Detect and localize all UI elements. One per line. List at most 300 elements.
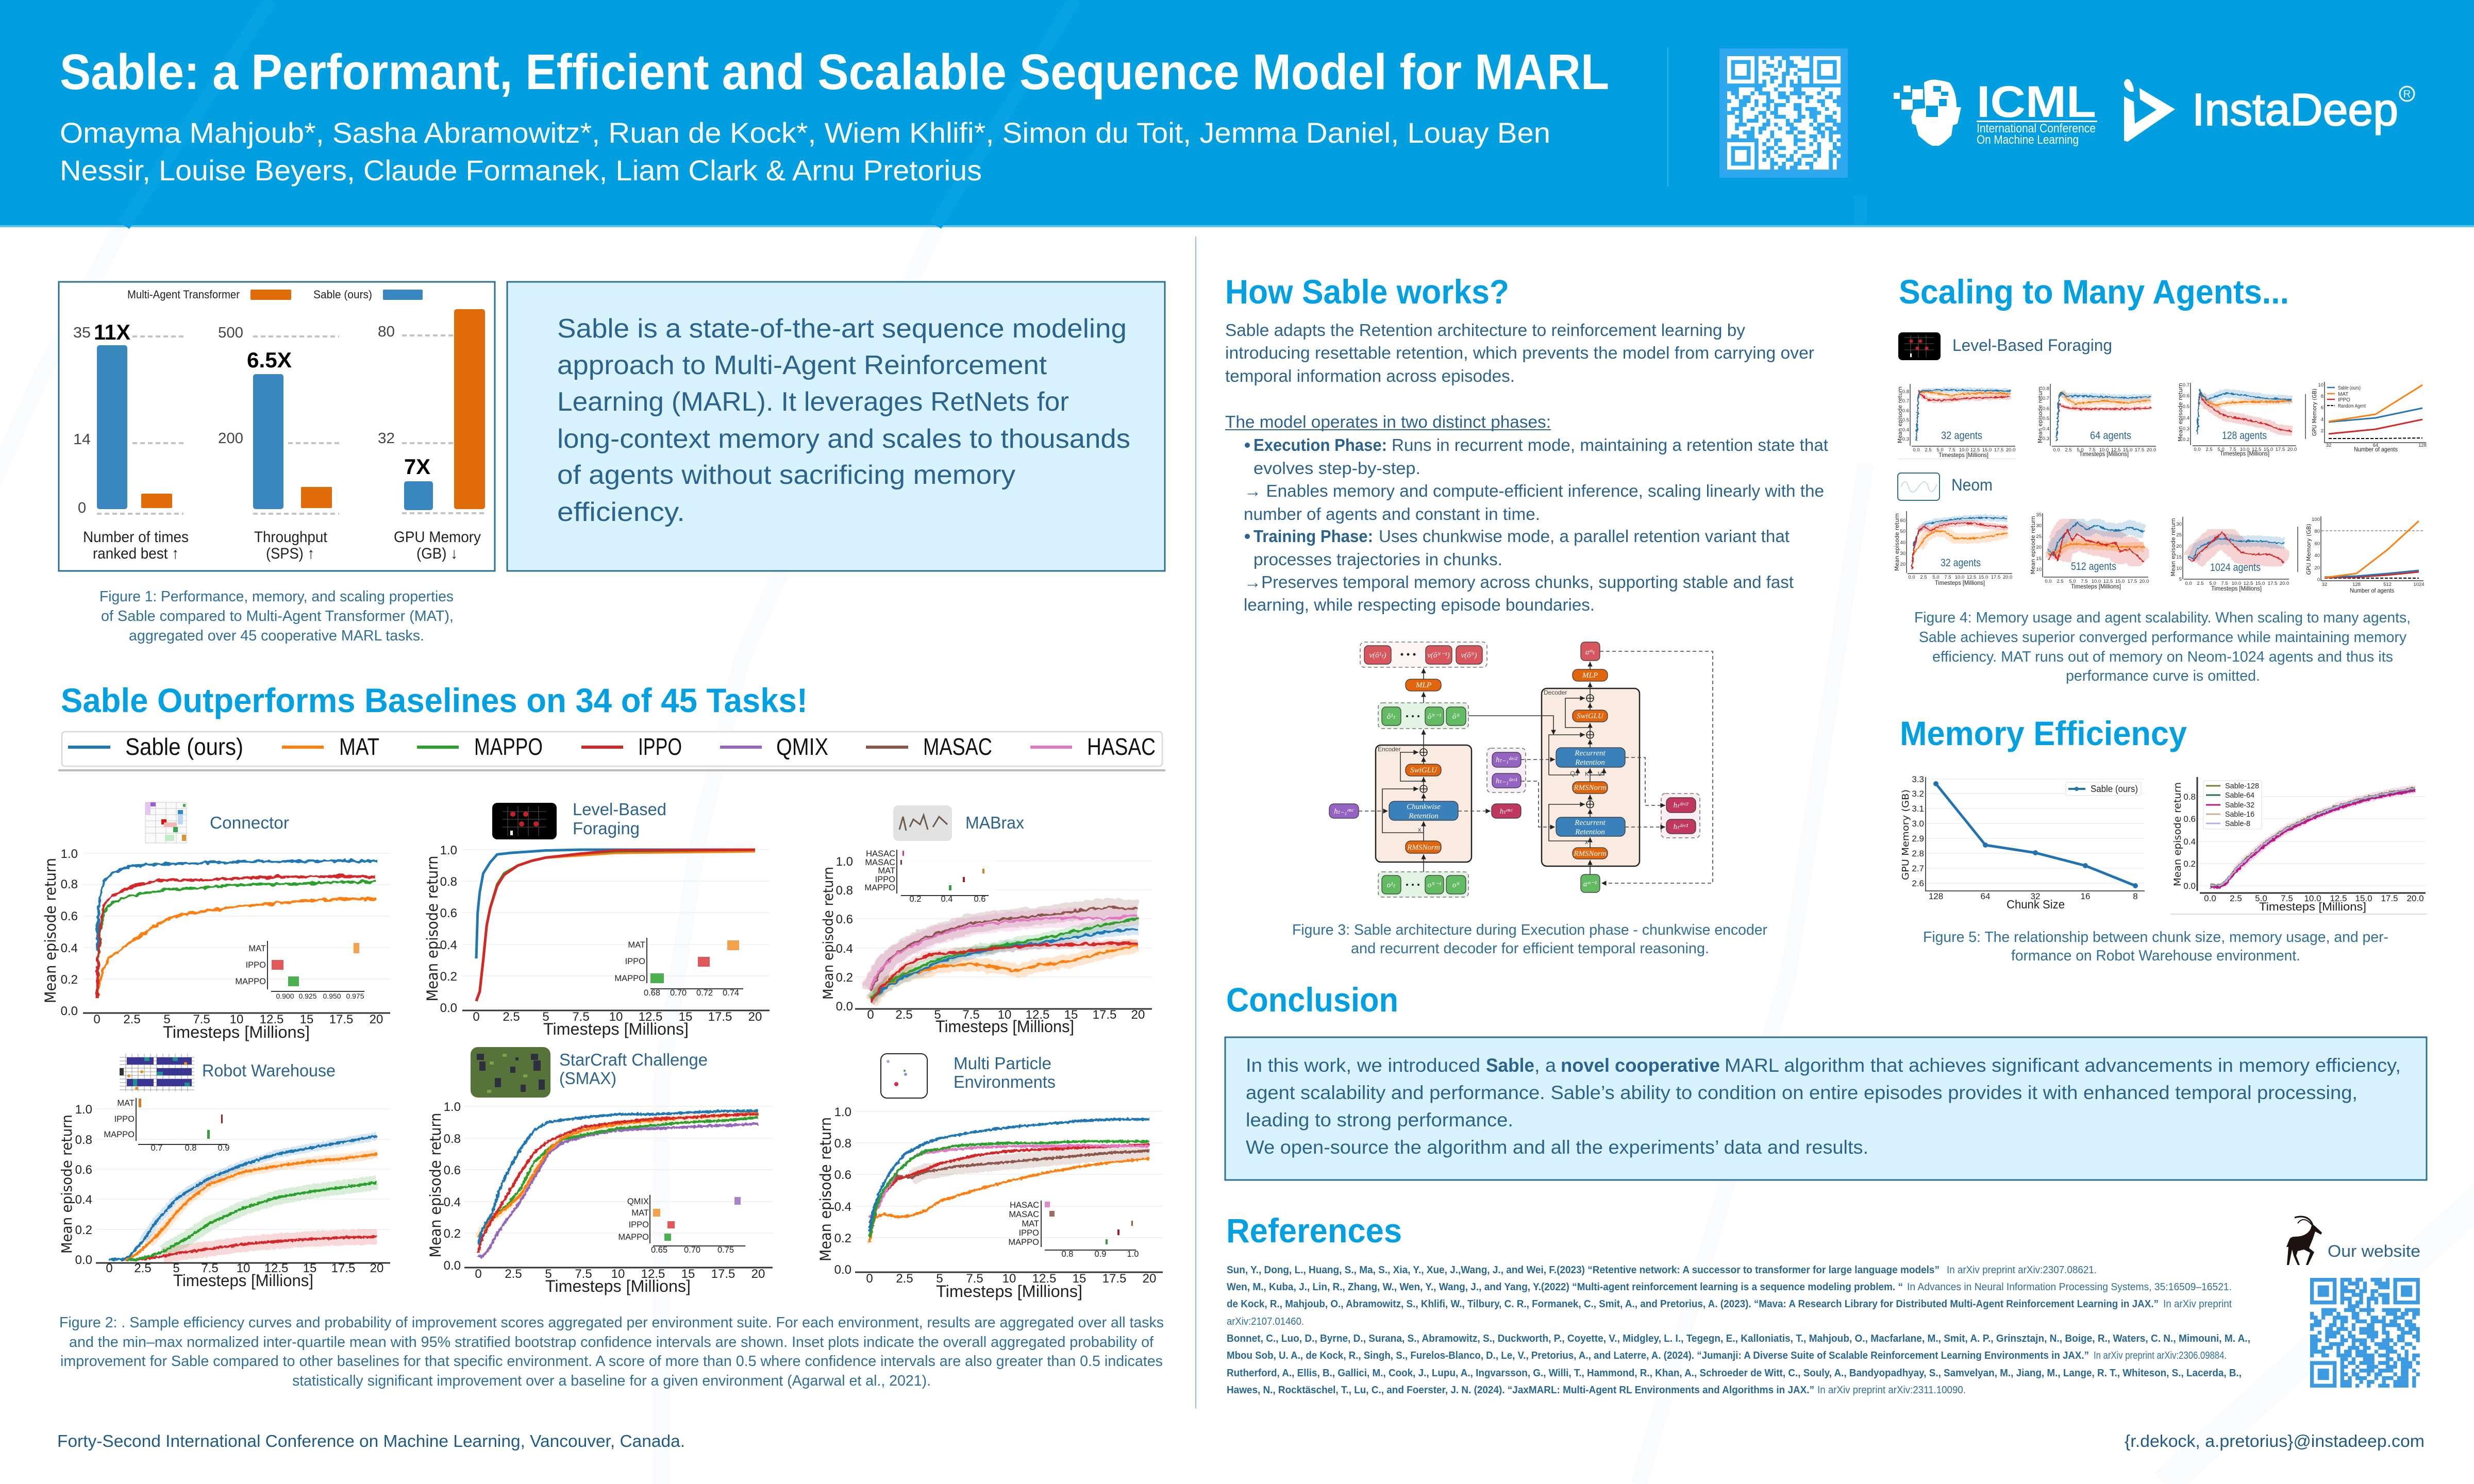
bar values: 14 bbox=[73, 431, 91, 448]
chart: Neom 32 agents: 50 bbox=[1900, 529, 1905, 534]
legend: Sable-8 bbox=[2225, 819, 2250, 828]
block labels: SwiGLU bbox=[1410, 766, 1437, 774]
conclusion callout: MARL algorithm that achieves significant advancements in memory efficiency, bbox=[1725, 1055, 2401, 1076]
chart: chunk size performance: Timesteps [Millions] bbox=[2259, 900, 2366, 913]
inset: MABrax probability of improvement: 0.4 bbox=[941, 895, 952, 904]
inset: MABrax probability of improvement: 0.6 bbox=[974, 895, 985, 904]
chart: LBF 32 agents: 0.5 bbox=[1902, 417, 1909, 423]
panel: Scaling to Many Agents: Neom bbox=[1951, 476, 1993, 494]
panel: SMAX bbox=[427, 1047, 773, 1295]
chart: LBF 32 agents: 0.7 bbox=[1902, 398, 1909, 404]
chart: Connector curves: 0.4 bbox=[61, 941, 78, 955]
chart: MABrax curves: 1.0 bbox=[836, 855, 853, 869]
chart: Neom 1024 agents bbox=[2170, 517, 2289, 592]
axis labels: Number of times bbox=[83, 529, 189, 546]
chart: LBF curves: 0 bbox=[473, 1010, 480, 1024]
chart: MABrax curves: 0.8 bbox=[836, 884, 853, 898]
conclusion callout bbox=[1225, 1037, 2427, 1180]
conclusion callout: Sable bbox=[1486, 1055, 1534, 1076]
chart: SMAX curves: 0.6 bbox=[444, 1163, 461, 1177]
block labels: MLP bbox=[1582, 671, 1598, 680]
chart: Connector curves: 1.0 bbox=[61, 847, 78, 861]
chart: LBF 32 agents: 0.6 bbox=[1902, 408, 1909, 414]
legend: Sable-32 bbox=[2225, 801, 2254, 810]
chart: chunk size performance: 20.0 bbox=[2406, 893, 2424, 903]
chart: MPE curves: 10 bbox=[1002, 1272, 1016, 1286]
chart: LBF 128 agents: 2.5 bbox=[2205, 447, 2213, 452]
icon: MABrax bbox=[893, 805, 952, 841]
block labels: Retention bbox=[1408, 812, 1439, 820]
chart: LBF 32 agents: 0.0 bbox=[1913, 447, 1920, 453]
phases text: →Preserves temporal memory across chunks, supporting stable and fast bbox=[1244, 572, 1794, 592]
inset: Connector probability of improvement: MAT bbox=[248, 944, 266, 953]
chart: MABrax curves: 15 bbox=[1064, 1008, 1078, 1022]
inset: MABrax probability of improvement: IPPO bbox=[875, 875, 895, 884]
chart: Neom 512 agents: 17.5 bbox=[2128, 579, 2137, 584]
chart: Neom 512 agents: 2.5 bbox=[2057, 579, 2064, 584]
figure 5 caption: Figure 5: The relationship between chunk size, memory usage, and per- bbox=[1923, 929, 2388, 946]
InstaDeep logo: R bbox=[2403, 89, 2411, 100]
chart: Neom 512 agents: 12.5 bbox=[2103, 579, 2113, 584]
chart: Neom 512 agents: 15.0 bbox=[2115, 579, 2125, 584]
panel: Scaling to Many Agents: Level-Based Foraging bbox=[1952, 336, 2112, 355]
chart: GPU memory vs chunk size: 64 bbox=[1981, 891, 1990, 901]
axis labels: Throughput bbox=[254, 529, 328, 546]
ICML logo bbox=[1894, 77, 2097, 147]
phases text: Runs in recurrent mode, maintaining a retention state that bbox=[1392, 435, 1828, 454]
heading: Memory Efficiency bbox=[1900, 714, 2187, 752]
reference list: Sun, Y., Dong, L., Huang, S., Ma, S., Xia, Y., Xue, J.,Wang, J., and Wei, F.(2023) “Retentive network: A successor to transformer for large language models” bbox=[1227, 1264, 1940, 1276]
inset: LBF probability of improvement bbox=[614, 938, 743, 998]
chart: chunk size performance: 7.5 bbox=[2281, 893, 2293, 903]
header banner bbox=[0, 0, 2474, 227]
chart: chunk size performance: 17.5 bbox=[2381, 893, 2398, 903]
figure 4 caption: Sable achieves superior converged performance while maintaining memory bbox=[1919, 629, 2406, 646]
chart: MABrax curves: 0.0 bbox=[836, 1000, 853, 1014]
axis labels: (SPS) ↑ bbox=[266, 545, 314, 562]
chart: Neom 32 agents: 15.0 bbox=[1979, 575, 1988, 580]
phases text: The model operates in two distinct phases: bbox=[1225, 412, 1551, 431]
chart: Robot Warehouse curves: 1.0 bbox=[75, 1103, 92, 1117]
chart: Neom 1024 agents: 17.5 bbox=[2268, 581, 2277, 586]
chart: Neom GPU memory: 80 bbox=[2314, 529, 2320, 534]
architecture diagram: x bbox=[1418, 826, 1421, 833]
chart: MABrax curves: 0.6 bbox=[836, 913, 853, 926]
figure 4 caption bbox=[1914, 610, 2411, 684]
block labels: v(ô¹ₜ) bbox=[1369, 651, 1386, 660]
chart: Neom GPU memory: 0 bbox=[2317, 577, 2320, 583]
inset: Robot Warehouse probability of improvement: MAPPO bbox=[104, 1130, 135, 1139]
block labels: Recurrent bbox=[1574, 819, 1606, 827]
architecture diagram bbox=[1329, 642, 1713, 897]
chart: LBF 64 agents: 5.0 bbox=[2077, 447, 2084, 453]
chart: SMAX curves: 12.5 bbox=[641, 1267, 665, 1281]
panel: Sable summary callout bbox=[507, 282, 1165, 571]
chart: Neom 32 agents: 20 bbox=[1900, 562, 1905, 567]
algorithm legend: IPPO bbox=[638, 733, 682, 760]
chart: Neom 32 agents: 7.5 bbox=[1944, 575, 1951, 580]
bar values: 35 bbox=[73, 325, 91, 341]
inset: MPE probability of improvement: IPPO bbox=[1019, 1228, 1039, 1238]
chart: SMAX curves: 20 bbox=[751, 1267, 765, 1281]
figure 4 caption: performance curve is omitted. bbox=[2066, 668, 2260, 684]
figure 1 caption bbox=[99, 588, 454, 644]
chart: Neom GPU memory: 512 bbox=[2383, 582, 2392, 587]
block labels: hₜᵈᵉᶜ¹ bbox=[1674, 823, 1689, 831]
chart: LBF 32 agents: 10.0 bbox=[1959, 447, 1968, 453]
chart: LBF curves: 15 bbox=[679, 1010, 692, 1024]
legend: Sable-128 bbox=[2225, 782, 2259, 790]
chart: Neom 1024 agents: 1024 agents bbox=[2210, 562, 2261, 574]
chart: LBF 128 agents bbox=[2178, 382, 2297, 457]
chart: Neom 32 agents: 32 agents bbox=[1941, 557, 1981, 569]
environment label line 2: (SMAX) bbox=[559, 1069, 616, 1088]
chart: Neom GPU memory: 128 bbox=[2352, 582, 2361, 587]
architecture diagram: Q bbox=[1570, 770, 1575, 777]
axis labels: ranked best ↑ bbox=[93, 545, 179, 562]
chart: SMAX curves: Mean episode return bbox=[427, 1113, 444, 1257]
chart: Neom 1024 agents: 10.0 bbox=[2232, 581, 2241, 586]
chart: LBF 64 agents: 0.4 bbox=[2043, 426, 2049, 432]
block labels: RMSNorm bbox=[1573, 850, 1607, 858]
chart: Neom 512 agents: 10.0 bbox=[2092, 579, 2101, 584]
value output boxes bbox=[1329, 642, 1696, 894]
inset: LBF probability of improvement: 0.68 bbox=[644, 988, 660, 998]
chart: LBF 32 agents: 20.0 bbox=[2006, 447, 2015, 453]
chart: MPE curves: 1.0 bbox=[834, 1105, 851, 1119]
chart: LBF 128 agents: 12.5 bbox=[2252, 447, 2261, 452]
block labels: hₜ₋₁ᵈᵉᶜ¹ bbox=[1496, 777, 1518, 785]
phases text: → Enables memory and compute-efficient inference, scaling linearly with the bbox=[1244, 481, 1824, 500]
chart: Neom 32 agents: 12.5 bbox=[1967, 575, 1976, 580]
bar values: 200 bbox=[218, 430, 243, 447]
inset: LBF probability of improvement: 0.72 bbox=[696, 988, 713, 998]
ICML logo: ICML bbox=[1977, 77, 2096, 127]
conclusion callout: We open-source the algorithm and all the experiments’ data and results. bbox=[1246, 1137, 1868, 1158]
chart: MABrax curves: 20 bbox=[1131, 1008, 1145, 1022]
figure 2 caption: improvement for Sable compared to other baselines for that specific environment. A score of more than 0.5 where confidence intervals are also greater than 0.5 indicates bbox=[60, 1353, 1163, 1370]
chart: Neom 512 agents: 25 bbox=[2036, 534, 2042, 539]
chart: Neom 512 agents bbox=[2030, 512, 2149, 590]
chart: LBF 128 agents: 0.7 bbox=[2183, 382, 2189, 388]
ICML logo: International Conference bbox=[1977, 122, 2096, 136]
panel: MABrax: MABrax bbox=[965, 813, 1024, 832]
chart: Robot Warehouse curves: Mean episode return bbox=[58, 1115, 75, 1254]
block labels: Recurrent bbox=[1574, 749, 1606, 757]
chart: Neom GPU memory: GPU Memory (GB) bbox=[2306, 524, 2312, 575]
inset: SMAX probability of improvement: 0.70 bbox=[684, 1245, 700, 1255]
panel: Sable summary callout: long-context memory and scales to thousands bbox=[557, 424, 1130, 454]
chart: LBF 64 agents: 15.0 bbox=[2123, 447, 2132, 453]
chart: SMAX curves: 0.2 bbox=[444, 1227, 461, 1241]
chart: GPU memory vs chunk size: 3.2 bbox=[1912, 789, 1924, 799]
figure 5 caption: formance on Robot Warehouse environment. bbox=[2011, 948, 2300, 964]
phases text: learning, while respecting episode boundaries. bbox=[1244, 595, 1595, 614]
inset: MPE probability of improvement: 0.9 bbox=[1095, 1250, 1106, 1259]
header QR code bbox=[1719, 48, 1848, 178]
chart: Neom 1024 agents: 20 bbox=[2176, 544, 2182, 549]
panel: Robot Warehouse: Robot Warehouse bbox=[202, 1061, 336, 1080]
chart: MPE curves: 0.4 bbox=[834, 1200, 851, 1214]
figure 4 caption: Figure 4: Memory usage and agent scalability. When scaling to many agents, bbox=[1914, 610, 2411, 626]
panel: Scaling to Many Agents bbox=[1894, 273, 2427, 684]
authors: Omayma Mahjoub*, Sasha Abramowitz*, Ruan de Kock*, Wiem Khlifi*, Simon du Toit, Jemma Daniel, Louay Ben bbox=[60, 116, 1550, 149]
chart: Robot Warehouse curves: 12.5 bbox=[264, 1261, 288, 1275]
phases text: processes trajectories in chunks. bbox=[1253, 550, 1502, 569]
algorithm legend bbox=[58, 732, 1165, 771]
chart: LBF 64 agents: 0.5 bbox=[2043, 416, 2049, 421]
chart: MPE curves: 0.6 bbox=[834, 1168, 851, 1182]
bars bbox=[97, 309, 485, 510]
chart: MPE curves: 0.0 bbox=[834, 1263, 851, 1277]
panel: Level-Based Foraging: Level-Based bbox=[573, 800, 666, 819]
axis labels: (GB) ↓ bbox=[416, 545, 458, 562]
inset: LBF probability of improvement: 0.70 bbox=[670, 988, 687, 998]
reference list: de Kock, R., Mahjoub, O., Abramowitz, S., Khlifi, W., Tilbury, C. R., Formanek, C., Smit, A., and Pretorius, A. (2023). “Mava: A Research Library for Distributed Multi-Agent Reinforcement Learning in JAX.” bbox=[1227, 1298, 2159, 1310]
panel: Multi Particle Environments bbox=[817, 1054, 1163, 1301]
panel: figure 1 bar chart: 7X bbox=[404, 454, 430, 479]
legend bbox=[2066, 782, 2141, 796]
chart: LBF 128 agents: 10.0 bbox=[2240, 447, 2249, 452]
architecture diagram: Encoder bbox=[1378, 746, 1401, 753]
block labels: oᴺ⁻¹ bbox=[1428, 881, 1442, 889]
block labels: hₜᵉⁿᶜ bbox=[1500, 807, 1513, 816]
chart: MABrax curves: 0 bbox=[867, 1008, 874, 1022]
block labels: v(ôᴺ⁻¹) bbox=[1427, 651, 1450, 660]
chart: MABrax curves: Timesteps [Millions] bbox=[935, 1017, 1074, 1036]
figure 2 caption: statistically significant improvement over a baseline for a given environment (Agarwal et al., 2021). bbox=[292, 1373, 931, 1389]
chart: MPE curves: Timesteps [Millions] bbox=[936, 1282, 1082, 1301]
chart: LBF 64 agents: 17.5 bbox=[2135, 447, 2144, 453]
phases text: Training Phase: bbox=[1253, 527, 1373, 546]
inset: Robot Warehouse probability of improvement: IPPO bbox=[114, 1115, 135, 1124]
chart: Neom 1024 agents: 12.5 bbox=[2244, 581, 2253, 586]
chart: LBF 32 agents: 2.5 bbox=[1925, 447, 1932, 453]
panel: Conclusion bbox=[1225, 981, 2427, 1180]
chart: Neom 1024 agents: Mean episode return bbox=[2170, 518, 2177, 577]
inset: Connector probability of improvement: IPPO bbox=[246, 960, 266, 970]
chart: Robot Warehouse curves: Timesteps [Millions] bbox=[173, 1271, 313, 1290]
chart: chunk size performance: 0.0 bbox=[2183, 881, 2196, 891]
figure 3 caption bbox=[1292, 922, 1767, 957]
phases text: Uses chunkwise mode, a parallel retention variant that bbox=[1379, 527, 1790, 546]
chart: SMAX curves: 17.5 bbox=[711, 1267, 735, 1281]
inset: MPE probability of improvement: 1.0 bbox=[1127, 1250, 1139, 1259]
chart: LBF 128 agents: 0.0 bbox=[2194, 447, 2201, 452]
inset: LBF probability of improvement: 0.74 bbox=[723, 988, 739, 998]
chart: Neom 512 agents: 35 bbox=[2036, 512, 2042, 518]
chart: Neom 32 agents: Mean episode return bbox=[1894, 513, 1900, 571]
block labels: hₜ₋₁ᵈᵉᶜ² bbox=[1496, 756, 1518, 764]
chart: MABrax curves: 0.4 bbox=[836, 942, 853, 956]
chart: MABrax curves: 17.5 bbox=[1093, 1008, 1116, 1022]
block labels: Chunkwise bbox=[1407, 803, 1441, 811]
architecture diagram: Decoder bbox=[1544, 689, 1567, 696]
chart: Neom 512 agents: Timesteps [Millions] bbox=[2071, 583, 2121, 590]
block labels: v(ôᴺ) bbox=[1461, 651, 1477, 660]
intro text: temporal information across episodes. bbox=[1225, 366, 1515, 385]
chart: Neom 32 agents: 20.0 bbox=[2003, 575, 2012, 580]
chart: GPU memory vs chunk size: GPU Memory (GB) bbox=[1900, 789, 1911, 880]
chart: LBF 64 agents: 0.6 bbox=[2043, 406, 2049, 412]
chart: LBF 64 agents: Timesteps [Millions] bbox=[2079, 450, 2129, 458]
chart: Connector curves: 10 bbox=[230, 1013, 243, 1026]
chart: Neom 1024 agents: 15 bbox=[2176, 554, 2182, 560]
legend: Multi-Agent Transformer bbox=[127, 288, 240, 301]
chart: MABrax curves: 10 bbox=[998, 1008, 1011, 1022]
inset: Connector probability of improvement: 0.950 bbox=[323, 992, 341, 1000]
chart: LBF 128 agents: 7.5 bbox=[2229, 447, 2236, 452]
chart: LBF 128 agents: 0.6 bbox=[2183, 393, 2189, 399]
authors: Nessir, Louise Beyers, Claude Formanek, Liam Clark & Arnu Pretorius bbox=[60, 154, 982, 187]
panel: figure 1 bar chart: 6.5X bbox=[247, 348, 292, 372]
panel: figure 1 bar chart: 11X bbox=[94, 320, 130, 344]
legend bbox=[2203, 781, 2262, 829]
icon: robot warehouse bbox=[120, 1054, 194, 1091]
chart: LBF GPU memory: 32 bbox=[2326, 443, 2331, 448]
chart: Neom 512 agents: 10 bbox=[2036, 567, 2042, 572]
environment label line 2: Environments bbox=[954, 1072, 1056, 1091]
icon: sable antelope bbox=[2286, 1217, 2322, 1265]
chart: GPU memory vs chunk size: 2.8 bbox=[1912, 849, 1924, 858]
chart: Neom 1024 agents: 7.5 bbox=[2221, 581, 2228, 586]
block labels: ôᴺ bbox=[1452, 713, 1460, 721]
figure 1 caption: aggregated over 45 cooperative MARL tasks. bbox=[129, 628, 424, 644]
InstaDeep logo: InstaDeep bbox=[2192, 84, 2398, 135]
legend bbox=[2327, 385, 2366, 409]
legend: Sable (ours) bbox=[2091, 784, 2138, 794]
icon: connector grid bbox=[145, 802, 187, 843]
chart: Connector curves: 7.5 bbox=[193, 1013, 210, 1026]
chart: Connector curves bbox=[42, 847, 390, 1041]
figure 5 caption bbox=[1923, 929, 2388, 964]
panel: Robot Warehouse bbox=[58, 1054, 390, 1290]
chart: Neom GPU memory: Number of agents bbox=[2350, 587, 2394, 594]
algorithm legend: HASAC bbox=[1087, 733, 1156, 760]
block labels: RMSNorm bbox=[1407, 844, 1440, 852]
chart: LBF 128 agents: 20.0 bbox=[2287, 447, 2297, 452]
chart: MPE curves: 0.8 bbox=[834, 1137, 851, 1151]
chart: Connector curves: 17.5 bbox=[329, 1013, 353, 1026]
chart: Neom 32 agents: 0.0 bbox=[1908, 575, 1915, 580]
chart: SMAX curves: 0.4 bbox=[444, 1195, 461, 1209]
inset: Robot Warehouse probability of improvement: 0.8 bbox=[185, 1143, 196, 1153]
algorithm legend: Sable (ours) bbox=[125, 733, 243, 760]
inset: MPE probability of improvement: MAPPO bbox=[1008, 1238, 1039, 1247]
chart: LBF GPU memory: 10 bbox=[2318, 382, 2323, 388]
inset: SMAX probability of improvement: MAPPO bbox=[618, 1233, 649, 1242]
chart: LBF 64 agents: Mean episode return bbox=[2037, 386, 2044, 443]
chart: LBF curves: 7.5 bbox=[572, 1010, 590, 1024]
legend: MAT bbox=[2338, 392, 2348, 397]
phases text: Execution Phase: bbox=[1253, 435, 1387, 454]
axis labels: GPU Memory bbox=[394, 529, 481, 546]
chart: Connector curves: 2.5 bbox=[123, 1013, 141, 1026]
reference list: In arXiv preprint arXiv:2307.08621. bbox=[1947, 1264, 2097, 1276]
chart: Robot Warehouse curves: 20 bbox=[370, 1261, 383, 1275]
icon: neom bbox=[1898, 473, 1940, 500]
chart: Neom 1024 agents: 5 bbox=[2179, 577, 2182, 582]
chart: LBF GPU memory: 2 bbox=[2321, 428, 2323, 434]
bar values: 500 bbox=[218, 325, 243, 341]
chart: Neom 1024 agents: 15.0 bbox=[2255, 581, 2265, 586]
inset: SMAX probability of improvement bbox=[618, 1195, 745, 1255]
chart: LBF GPU memory: GPU Memory (GB) bbox=[2312, 389, 2318, 436]
chart: Connector curves: 15 bbox=[300, 1013, 313, 1026]
inset: Robot Warehouse probability of improvement: 0.7 bbox=[151, 1143, 162, 1153]
chart: LBF 32 agents: 5.0 bbox=[1936, 447, 1944, 453]
chart: chunk size performance: 0.6 bbox=[2183, 814, 2196, 824]
chart: Connector curves: 0.8 bbox=[61, 878, 78, 891]
chart: LBF curves: 0.2 bbox=[440, 970, 457, 984]
block labels: Retention bbox=[1575, 828, 1605, 836]
panel: Sable summary callout: efficiency. bbox=[557, 497, 685, 527]
algorithm legend: MASAC bbox=[923, 733, 992, 760]
chart: LBF curves: 0.0 bbox=[440, 1001, 457, 1015]
axis labels bbox=[83, 529, 481, 562]
intro text bbox=[1225, 321, 1814, 385]
chart: SMAX curves: 1.0 bbox=[444, 1100, 461, 1114]
chart: MPE curves: 5 bbox=[936, 1272, 943, 1286]
chart: GPU memory vs chunk size: 32 bbox=[2031, 891, 2040, 901]
icon: multi particle bbox=[881, 1054, 927, 1098]
inset: Connector probability of improvement bbox=[235, 941, 364, 1000]
panel: figure 1 bar chart bbox=[59, 282, 495, 571]
chart: LBF 128 agents: 0.4 bbox=[2183, 415, 2189, 421]
reference list: Rutherford, A., Ellis, B., Gallici, M., Cook, J., Lupu, A., Ingvarsson, G., Willi, T., Hammond, R., Khan, A., Schroeder de Witt, C., Souly, A., Bandyopadhyay, S., Samvelyan, M., Jiang, M., Lange, R. T., Whiteson, S., Lacerda, B., bbox=[1227, 1368, 2242, 1379]
chart: LBF 128 agents: Timesteps [Millions] bbox=[2220, 450, 2269, 457]
chart: Neom 1024 agents: Timesteps [Millions] bbox=[2211, 585, 2262, 592]
chart: chunk size performance: 5.0 bbox=[2255, 893, 2267, 903]
reference list bbox=[1227, 1264, 2250, 1396]
conclusion callout: leading to strong performance. bbox=[1246, 1109, 1513, 1131]
panel: Sable summary callout: Sable is a state-of-the-art sequence modeling bbox=[557, 314, 1127, 344]
chart: MPE curves: 15 bbox=[1073, 1272, 1086, 1286]
legend: Sable (ours) bbox=[313, 288, 372, 301]
inset: MPE probability of improvement: HASAC bbox=[1010, 1201, 1039, 1210]
chart: Neom 32 agents: 5.0 bbox=[1932, 575, 1940, 580]
panel: Connector: Connector bbox=[210, 813, 289, 832]
chart: LBF 64 agents: 0.3 bbox=[2043, 436, 2049, 442]
chart: chunk size performance: 0.4 bbox=[2183, 837, 2196, 847]
chart: MABrax curves bbox=[821, 848, 1152, 1036]
chart: LBF curves: 2.5 bbox=[503, 1010, 520, 1024]
conclusion callout: agent scalability and performance. Sable’s ability to condition on entire episodes provides it with enhanced temporal processing, bbox=[1246, 1082, 2358, 1103]
chart: LBF 32 agents: 7.5 bbox=[1948, 447, 1955, 453]
chart: Neom 512 agents: 15 bbox=[2036, 556, 2042, 562]
heading: References bbox=[1226, 1211, 1402, 1250]
chart: LBF 64 agents: 12.5 bbox=[2111, 447, 2120, 453]
chart: LBF 32 agents: 12.5 bbox=[1970, 447, 1980, 453]
chart: LBF 32 agents: Mean episode return bbox=[1897, 386, 1903, 443]
chart: Connector curves: Timesteps [Millions] bbox=[163, 1023, 310, 1041]
connectors bbox=[1359, 651, 1713, 883]
chart: LBF 32 agents: 15.0 bbox=[1982, 447, 1992, 453]
chart: Neom 512 agents: 5.0 bbox=[2069, 579, 2076, 584]
chart: LBF GPU memory: 64 bbox=[2373, 443, 2378, 448]
conclusion callout: In this work, we introduced bbox=[1246, 1055, 1480, 1076]
chart: Neom 512 agents: 7.5 bbox=[2081, 579, 2088, 584]
intro text: Sable adapts the Retention architecture to reinforcement learning by bbox=[1225, 321, 1745, 340]
phases text bbox=[1225, 412, 1828, 614]
chart: LBF 64 agents bbox=[2037, 384, 2156, 458]
chart: Neom 1024 agents: 10 bbox=[2176, 566, 2182, 571]
algorithm legend: MAPPO bbox=[474, 733, 543, 760]
chart: Robot Warehouse curves: 7.5 bbox=[201, 1261, 219, 1275]
chart: MABrax curves: 0.2 bbox=[836, 971, 853, 985]
legend: Random Agent bbox=[2338, 403, 2366, 409]
environment label line 2: Foraging bbox=[573, 819, 640, 838]
